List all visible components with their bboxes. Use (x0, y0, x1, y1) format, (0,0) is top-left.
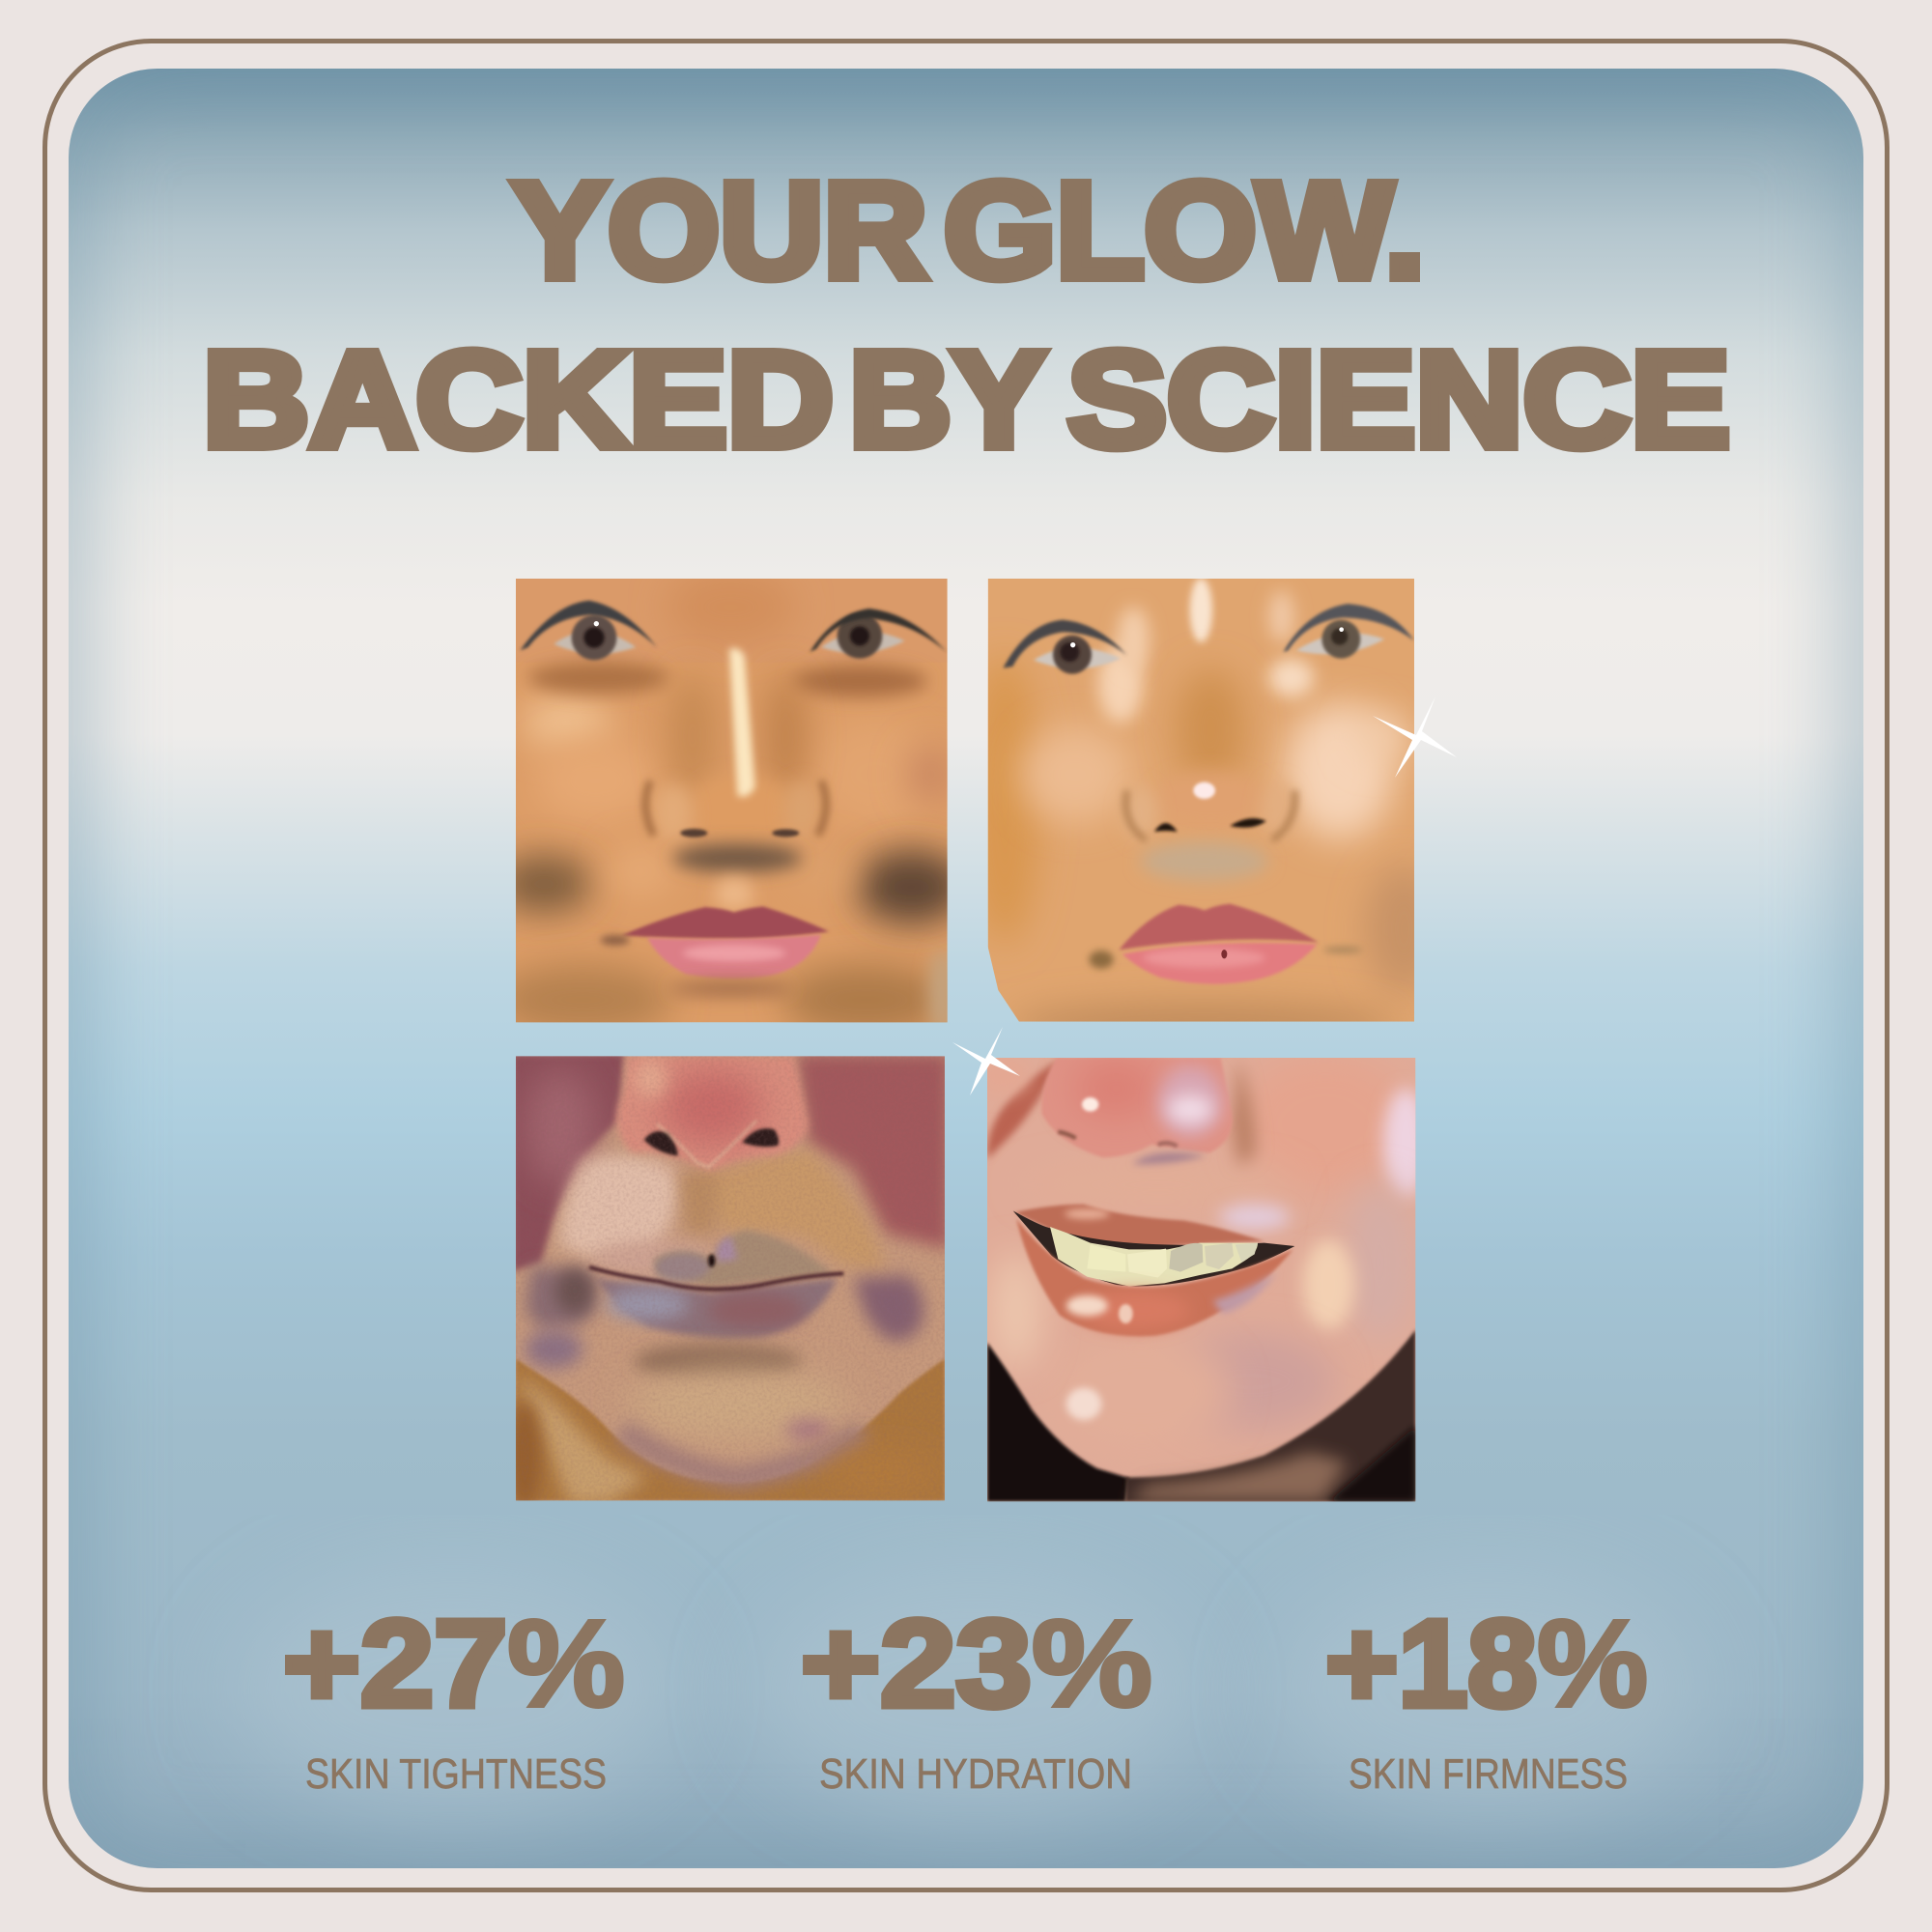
photo: before, upper face (516, 579, 948, 1022)
title line 2: BACKED (203, 323, 834, 475)
title line 1: GLOW. (944, 154, 1425, 306)
title line 1: YOUR (512, 154, 927, 306)
stat: skin tightness (283, 1595, 625, 1798)
label skin tightness: SKIN TIGHTNESS (305, 1750, 607, 1798)
photo: before, lower face (509, 1053, 950, 1510)
title line 1 (512, 154, 1425, 306)
icon: sparkle on after cheek (1373, 696, 1457, 778)
photo: after, lower face (978, 1053, 1429, 1501)
title line 2: SCIENCE (1067, 323, 1730, 475)
label skin firmness: SKIN FIRMNESS (1349, 1750, 1628, 1798)
title (203, 154, 1730, 475)
title line 2: BY (849, 323, 1046, 475)
value +23%: +23% (801, 1595, 1152, 1733)
title line 2 (203, 323, 1730, 475)
value +27%: +27% (283, 1595, 625, 1733)
photo: after, upper face (987, 579, 1414, 1022)
label skin hydration: SKIN HYDRATION (819, 1750, 1132, 1798)
stat: skin firmness (1325, 1595, 1648, 1798)
stat: skin hydration (801, 1595, 1152, 1798)
before and after photo grid (493, 568, 1457, 1510)
icon: sparkle between photos (952, 1027, 1020, 1095)
value +18%: +18% (1325, 1595, 1648, 1733)
